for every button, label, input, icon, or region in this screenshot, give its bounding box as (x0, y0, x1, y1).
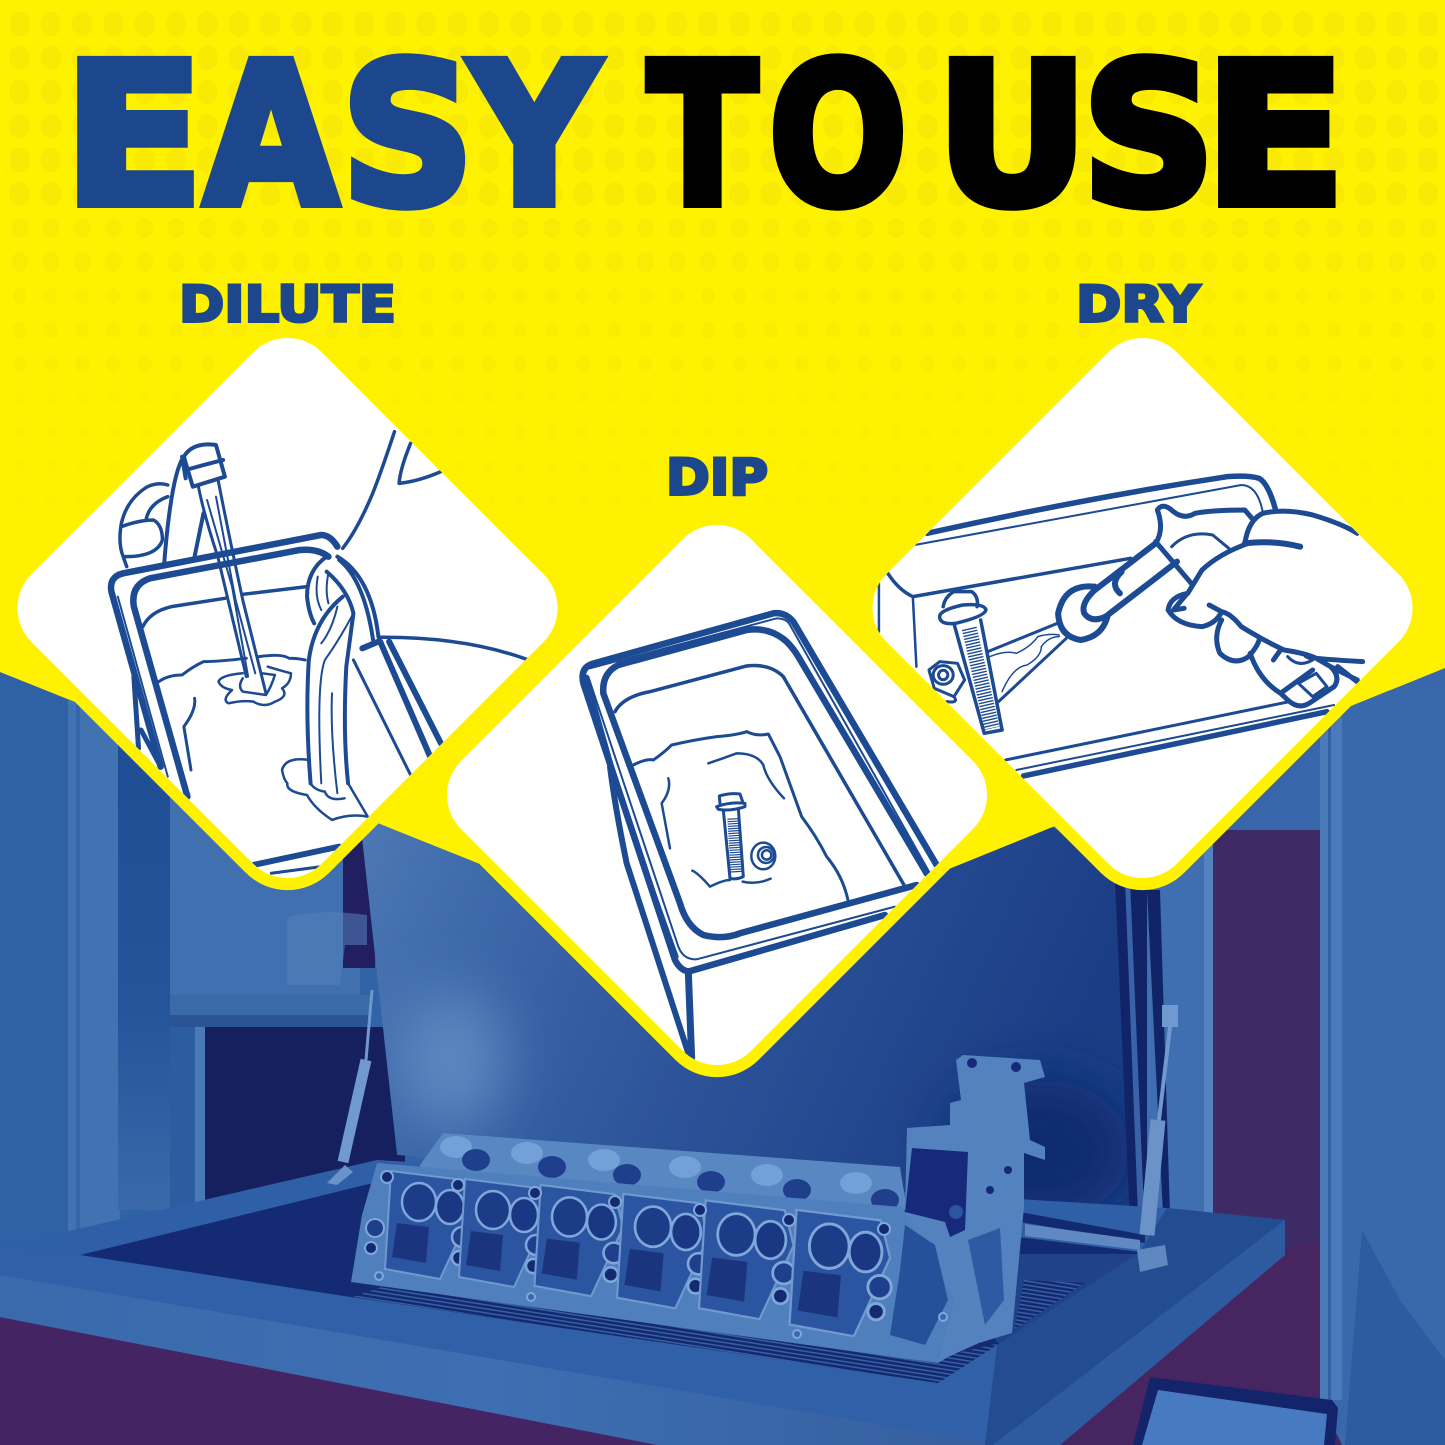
tablet (1133, 1377, 1338, 1445)
person (343, 432, 527, 659)
counter bevel, right (1060, 1255, 1285, 1445)
title: S (1082, 22, 1215, 249)
counter top surface, front (80, 1255, 997, 1383)
water back and front (143, 587, 307, 627)
title: U (936, 22, 1088, 249)
splash (218, 667, 291, 705)
bar behind the engine (1020, 1212, 1145, 1243)
yellow border (0, 301, 594, 915)
white diamond (853, 318, 1432, 898)
title (64, 22, 1345, 249)
hand (1168, 511, 1357, 627)
plate screws (375, 1272, 947, 1338)
tank rims (111, 535, 337, 767)
lid (362, 824, 1130, 1206)
title: S (341, 22, 474, 249)
tray edges (927, 476, 1275, 533)
step heading: dry: DRY (1076, 276, 1201, 334)
title: T (648, 22, 757, 249)
right wall (1147, 854, 1204, 1212)
intake ports (440, 1136, 872, 1194)
yellow border (410, 488, 1024, 1102)
stream (198, 478, 266, 693)
lid hinge frame (1115, 884, 1147, 1206)
knob (120, 484, 168, 567)
gas strut left (327, 990, 372, 1185)
illustration: dilute, tap filling a tank (111, 432, 527, 873)
air gun (1058, 543, 1177, 640)
photo: engine head in parts washer, blue duotone (0, 660, 1445, 1445)
illustration: dry, air gun blowing a bolt (879, 476, 1363, 776)
engine head casting (351, 1055, 1045, 1363)
panel: dry (836, 301, 1445, 915)
bolt (717, 794, 745, 879)
white diamond (427, 505, 1007, 1085)
air blast (988, 623, 1066, 702)
step heading: dilute: DILUTE (179, 276, 396, 334)
left water holes (366, 1219, 384, 1237)
nut (751, 843, 775, 869)
gas strut right (1137, 1005, 1178, 1272)
nut (929, 662, 965, 702)
tank rims (583, 613, 937, 972)
basin (80, 1168, 1140, 1383)
bolt (940, 592, 1002, 733)
wire mesh (353, 1283, 1000, 1383)
bolt holes (381, 1171, 890, 1235)
legs (610, 767, 688, 1053)
panel: dilute (0, 301, 594, 915)
white diamond (0, 318, 577, 898)
counter top surface, right (985, 1208, 1285, 1445)
panel: dip (410, 488, 1024, 1102)
background wall (0, 660, 1445, 1445)
title: E (64, 22, 204, 249)
tower end (905, 1055, 1045, 1363)
dotted halftone pattern (0, 7, 1445, 517)
rear bank (420, 1133, 907, 1210)
yellow border (836, 301, 1445, 915)
title: O (769, 22, 907, 249)
cylinders (385, 1171, 472, 1279)
tank right side (362, 642, 441, 757)
purple cabinet (0, 1317, 660, 1445)
front plate (351, 1163, 955, 1363)
counter top (0, 1160, 1285, 1445)
title: Y (469, 22, 601, 249)
step heading: dip: DIP (666, 448, 768, 506)
outflow ribbon (307, 557, 378, 783)
illustration: dip, bolt in a tank (583, 613, 937, 1058)
water (615, 666, 905, 887)
title: E (1204, 22, 1345, 249)
title: A (204, 22, 338, 249)
faucet (164, 444, 225, 563)
counter lip (0, 1275, 985, 1445)
